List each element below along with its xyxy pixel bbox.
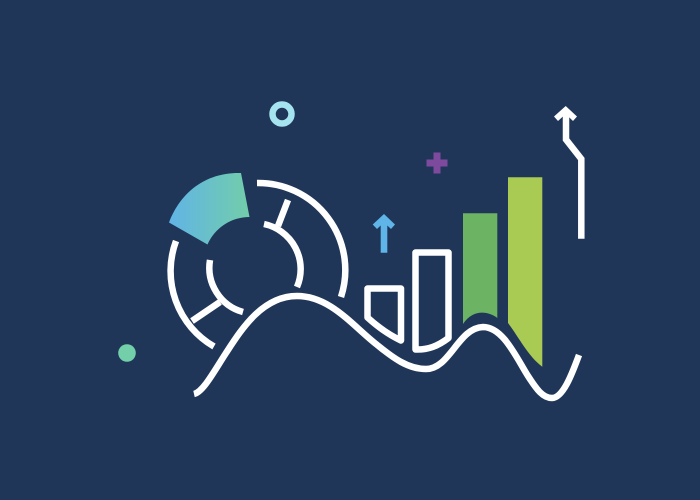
- outlined bar: medium: [416, 252, 448, 350]
- outlined bar: short: [368, 288, 401, 340]
- icon: ring: [272, 104, 292, 124]
- bar chart: [368, 177, 542, 367]
- donut chart: [169, 173, 345, 346]
- icon: white rising arrow: [554, 106, 581, 239]
- green bar: [463, 213, 497, 324]
- icon: blue up arrow: [373, 214, 395, 253]
- highlighted donut segment: [169, 173, 250, 244]
- outer ring arcs: [171, 183, 345, 346]
- icon: green dot: [118, 344, 136, 362]
- trend wave line: [194, 296, 579, 398]
- icon: purple plus: [426, 152, 448, 174]
- lime bar: [508, 177, 542, 367]
